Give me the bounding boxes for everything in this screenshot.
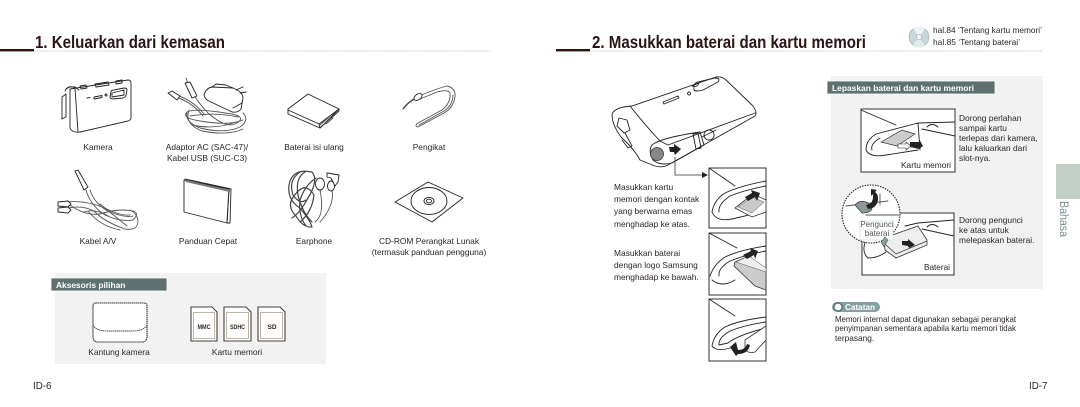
panel heading: Lepaskan baterai dan kartu memori <box>832 83 974 93</box>
side tab: language <box>1056 164 1080 238</box>
item: CD-ROM <box>395 182 463 222</box>
text: insert battery <box>614 248 699 282</box>
label: pouch: Kantung kamera <box>88 347 150 357</box>
callout: battery lock magnifier: Pengunci <box>860 220 894 229</box>
heading: section 1: 1. Keluarkan dari kemasan <box>35 32 225 52</box>
item: AV cable <box>58 170 138 230</box>
text: removing battery instructions: ke atas untuk <box>959 225 1010 235</box>
item: camera <box>62 80 131 132</box>
text: removing battery instructions: melepaskan baterai. <box>959 235 1034 245</box>
label: AC adaptor and USB cable <box>166 142 249 163</box>
text: removing battery instructions: Dorong pengunci <box>959 215 1023 225</box>
item: SDHC card <box>224 307 251 341</box>
text: note: Memori internal dapat digunakan sebagai perangkat <box>835 314 1017 324</box>
item: quick guide booklet <box>184 179 231 223</box>
label: AC adaptor and USB cable: Adaptor AC (SAC-47)/ <box>166 142 249 152</box>
item: AC adaptor and USB cable <box>168 78 246 133</box>
text: insert card: Masukkan kartu <box>614 182 673 192</box>
callout: battery lock magnifier: baterai <box>865 229 889 238</box>
page number right: ID-7 <box>1029 381 1048 392</box>
text: insert battery: Masukkan baterai <box>614 248 680 258</box>
illustration: inserting battery <box>709 233 766 295</box>
panel: optional accessories <box>51 273 326 364</box>
reference links: hal.84 ‘Tentang kartu memori’ <box>933 26 1042 35</box>
text: insert battery: menghadap ke bawah. <box>614 272 699 282</box>
illustration: removing card: Kartu memori <box>901 160 951 170</box>
page number left: ID-6 <box>33 381 52 392</box>
text: removing card instructions: slot-nya. <box>959 153 991 163</box>
text: removing card instructions <box>959 113 1038 163</box>
callout: battery lock magnifier <box>842 185 900 247</box>
text: insert battery: dengan logo Samsung <box>614 260 698 270</box>
panel heading <box>51 278 167 291</box>
heading: section 2: 2. Masukkan baterai dan kartu memori <box>592 32 866 52</box>
text: insert card: memori dengan kontak <box>614 194 700 204</box>
text: removing card instructions: sampai kartu <box>959 123 1007 133</box>
arrow: to card slot <box>675 157 708 178</box>
item: rechargeable battery <box>288 94 339 128</box>
illustration: removing battery <box>862 213 954 275</box>
label: AV cable: Kabel A/V <box>80 236 117 246</box>
label: memory cards: Kartu memori <box>212 347 262 357</box>
item: camera pouch <box>93 303 147 342</box>
item: SDHC card: SDHC <box>230 324 245 331</box>
item: SD card <box>258 307 285 341</box>
illustration: inserting card <box>709 168 766 228</box>
text: removing card instructions: Dorong perlahan <box>959 113 1022 123</box>
label: strap: Pengikat <box>413 142 446 152</box>
panel heading: Aksesoris pilihan <box>56 280 125 290</box>
text: note: terpasang. <box>835 333 874 343</box>
badge: note: Catatan <box>845 303 875 312</box>
text: note: penyimpanan sementara apabila kartu memori tidak <box>835 323 1017 333</box>
text: removing card instructions: lalu kaluarkan dari <box>959 143 1027 153</box>
label: CD-ROM: CD-ROM Perangkat Lunak <box>379 236 480 246</box>
label: CD-ROM <box>372 236 486 257</box>
text: insert card <box>614 182 700 229</box>
item: MMC card: MMC <box>198 324 211 331</box>
text: removing card instructions: terlepas dari kamera, <box>959 133 1038 143</box>
text: removing battery instructions <box>959 215 1034 245</box>
icon: reference disc <box>909 26 929 48</box>
text: insert card: menghadap ke atas. <box>614 219 690 229</box>
badge: note <box>832 302 880 312</box>
illustration: closing cover <box>709 299 766 361</box>
label: quick guide: Panduan Cepat <box>179 236 238 246</box>
illustration: camera underside <box>612 77 756 167</box>
item: MMC card <box>191 307 217 341</box>
panel heading <box>827 81 995 94</box>
label: battery: Baterai isi ulang <box>284 142 344 152</box>
label: CD-ROM: (termasuk panduan pengguna) <box>372 247 486 257</box>
side tab: language: Bahasa <box>1057 201 1069 238</box>
item: SD card: SD <box>267 324 277 331</box>
label: camera: Kamera <box>83 142 113 152</box>
illustration: removing card <box>861 109 955 172</box>
item: wrist strap <box>403 86 455 127</box>
item: earphones <box>289 171 339 227</box>
reference links: hal.85 ‘Tentang baterai’ <box>933 38 1020 47</box>
illustration: removing battery: Baterai <box>924 262 950 272</box>
text: note <box>835 314 1017 343</box>
label: AC adaptor and USB cable: Kabel USB (SUC-C3) <box>167 153 247 163</box>
label: earphones: Earphone <box>296 236 332 246</box>
reference links <box>933 26 1042 47</box>
panel: remove battery and card <box>827 76 1043 289</box>
text: insert card: yang berwarna emas <box>614 206 692 216</box>
